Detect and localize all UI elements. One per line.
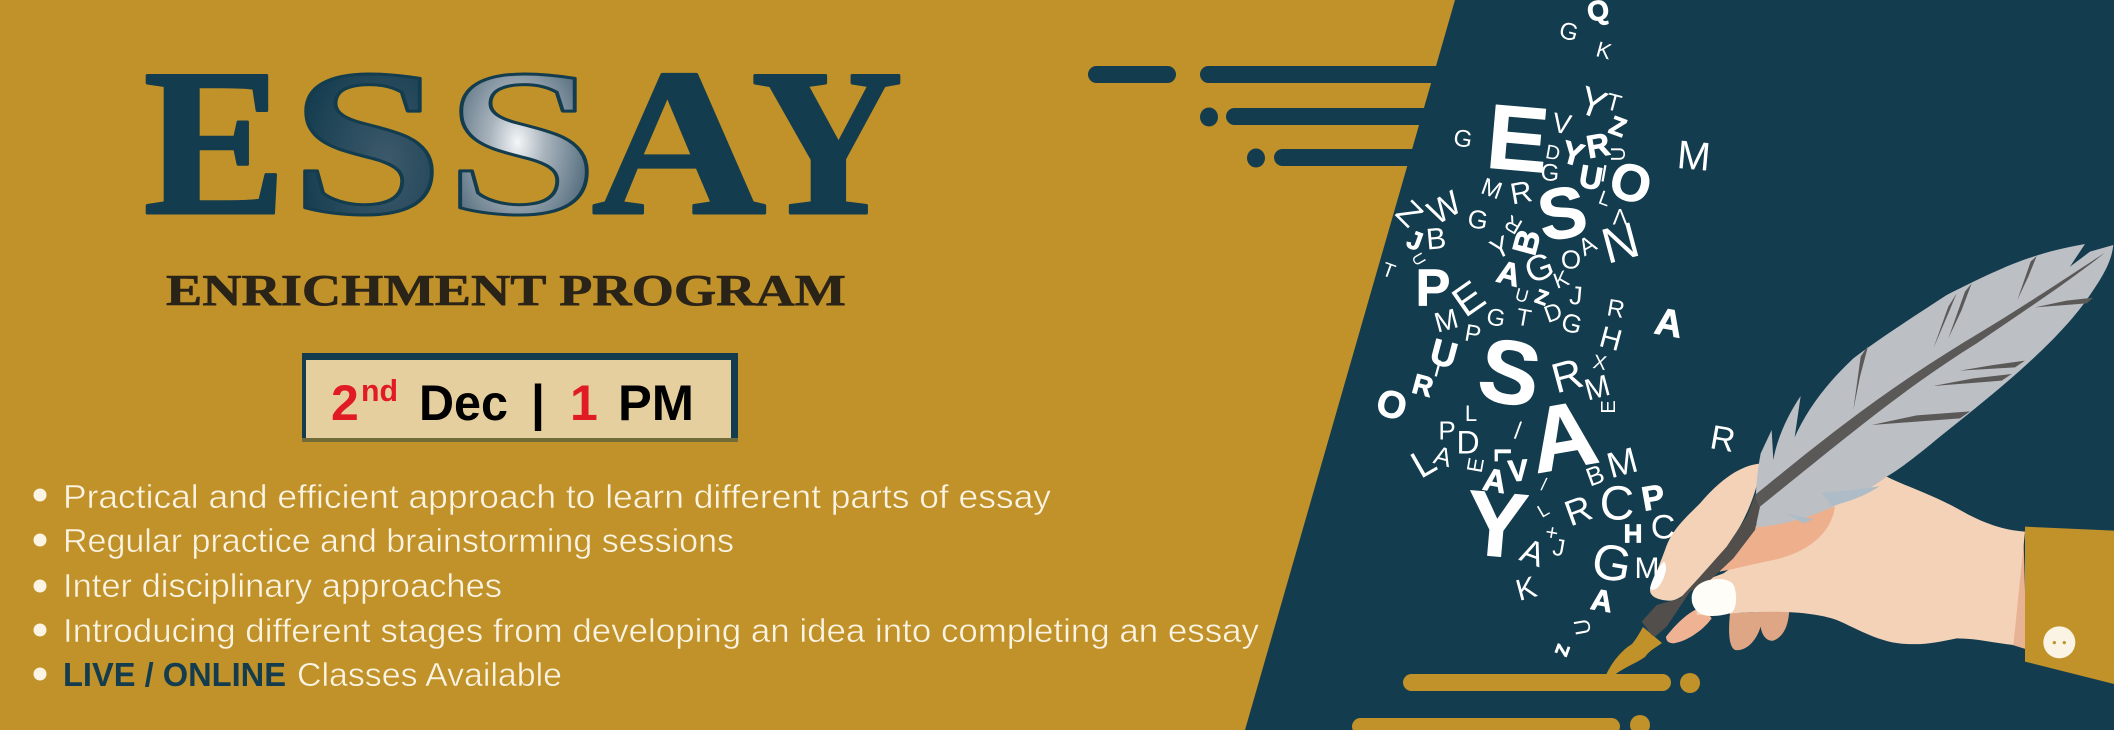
floating letters: T (1603, 88, 1625, 118)
floating letters: Z (1551, 642, 1574, 659)
floating letters: K (1594, 36, 1615, 64)
floating letters: M (1634, 552, 1660, 585)
floating letters: Z (1532, 286, 1551, 311)
floating letters: W (1421, 184, 1468, 233)
floating letters: I (1598, 160, 1609, 188)
bullet 5 (34, 656, 562, 693)
floating letters (1372, 0, 1738, 659)
floating letters: J (1403, 224, 1427, 257)
floating letters: Y (1485, 229, 1516, 266)
title: ESSAY: E (144, 26, 286, 259)
floating letters: P (1463, 319, 1483, 349)
bullet 1: Practical and efficient approach to learn different parts of essay (63, 478, 1052, 515)
floating letters: D (1544, 141, 1562, 165)
floating letters: O (1372, 382, 1411, 430)
floating letters: B (1582, 458, 1608, 492)
floating letters: R (1409, 368, 1437, 403)
title: ESSAY: S (445, 26, 599, 258)
icon: shirt sleeve (2013, 527, 2114, 684)
floating letters: V (1550, 107, 1574, 141)
icon: pen nib (1606, 627, 1662, 677)
floating letters: U (1576, 158, 1605, 197)
floating letters: E (1462, 456, 1489, 474)
floating letters: G (1539, 159, 1560, 187)
floating letters: E (1598, 400, 1620, 414)
date badge: | (531, 375, 545, 432)
floating letters: + (1543, 519, 1560, 546)
floating letters: A (1493, 253, 1525, 294)
floating letters: M (1478, 173, 1506, 205)
floating letters: P (1438, 415, 1456, 445)
floating letters: S (1532, 170, 1593, 257)
floating letters: L (1534, 499, 1553, 522)
floating letters: E (1483, 86, 1553, 193)
floating letters: G (1558, 306, 1586, 340)
floating letters: A (1652, 301, 1686, 347)
floating letters: P (1416, 260, 1450, 318)
floating letters: L (1596, 187, 1614, 211)
floating letters: H (1596, 321, 1625, 358)
bullet list (34, 478, 1260, 693)
floating letters: R (1508, 175, 1535, 211)
bullet 2: Regular practice and brainstorming sessions (63, 522, 734, 559)
floating letters: U (1513, 284, 1531, 307)
floating letters: L (1465, 401, 1477, 426)
icon: feather (1755, 244, 2113, 527)
floating letters: M (1602, 439, 1642, 486)
floating letters: K (1512, 571, 1540, 608)
floating letters: N (1596, 211, 1645, 275)
bullet 5: Classes Available (297, 656, 562, 693)
floating letters: R (1707, 418, 1738, 460)
title: ESSAY: A (592, 26, 766, 258)
icon: pen barrel (1642, 495, 1760, 637)
floating letters: D (1541, 297, 1566, 329)
floating letters: J (1568, 280, 1584, 311)
floating letters: M (1431, 303, 1461, 339)
floating letters: Y (1462, 472, 1532, 579)
floating letters: G (1451, 124, 1474, 154)
floating letters: Y (1572, 78, 1613, 129)
title: ESSAY (144, 26, 903, 259)
floating letters: R (1605, 294, 1627, 324)
floating letters: G (1556, 17, 1581, 48)
floating letters: H (1624, 518, 1642, 548)
icon: fingernail (1650, 562, 1666, 590)
date badge: Dec (419, 375, 508, 431)
illustration: hand holding quill (1642, 244, 2114, 684)
bullet 5: LIVE / ONLINE (63, 656, 286, 693)
icon: hand (1697, 477, 2025, 645)
floating letters: / (1513, 417, 1523, 445)
floating letters: A (1515, 531, 1550, 575)
floating letters: E (1443, 271, 1493, 326)
title: ESSAY: Y (751, 27, 903, 259)
floating letters: A (1431, 440, 1456, 473)
bullet 4: Introducing different stages from developing an idea into completing an essay (63, 612, 1260, 649)
speed lines (1088, 66, 1460, 168)
floating letters: Z (1388, 193, 1430, 235)
floating letters: O (1604, 150, 1658, 217)
floating letters: Z (1605, 110, 1631, 143)
gold writing lines (1352, 673, 1700, 730)
floating letters: X (1591, 351, 1608, 375)
floating letters: / (1540, 474, 1548, 495)
floating letters: M (1675, 133, 1712, 180)
floating letters: C (1600, 477, 1634, 530)
date badge (302, 353, 738, 442)
floating letters: P (1639, 478, 1668, 519)
floating letters: U (1426, 330, 1462, 377)
floating letters: V (1612, 204, 1627, 229)
panel: navy diagonal (1245, 0, 2114, 730)
floating letters: A (1522, 381, 1605, 493)
floating letters: G (1465, 203, 1491, 236)
date badge: nd (361, 373, 398, 408)
floating letters: R (1546, 349, 1588, 402)
floating letters: T (1379, 259, 1398, 284)
floating letters: S (1471, 319, 1548, 428)
floating letters: A (1574, 230, 1601, 262)
floating letters: Y (1558, 133, 1588, 174)
floating letters: J (1551, 534, 1567, 562)
floating letters: R (1584, 126, 1613, 165)
date badge: PM (618, 375, 694, 431)
floating letters: I (1431, 355, 1444, 383)
floating letters: U (1608, 147, 1630, 161)
floating letters: U (1569, 617, 1596, 637)
subtitle: enrichment program: ENRICHMENT PROGRAM (166, 266, 846, 315)
floating letters: V (1507, 454, 1530, 489)
floating letters: L (1490, 448, 1515, 462)
floating letters: A (1480, 461, 1509, 500)
bullet 3: Inter disciplinary approaches (63, 567, 502, 604)
date badge: 2 (331, 375, 359, 431)
icon: thumbnail (1692, 579, 1736, 616)
floating letters: U (1408, 250, 1428, 269)
floating letters: C (1651, 508, 1675, 546)
floating letters: M (1581, 369, 1614, 407)
title: ESSAY: S (290, 26, 444, 258)
floating letters: B (1506, 226, 1549, 259)
floating letters: O (1561, 244, 1581, 274)
floating letters: R (1500, 210, 1526, 239)
icon: lower fingers (1666, 607, 1789, 650)
date badge: 1 (570, 375, 598, 431)
floating letters: D (1456, 425, 1480, 461)
floating letters: A (1588, 583, 1615, 619)
floating letters: R (1559, 487, 1597, 534)
floating letters: K (1550, 265, 1573, 294)
icon: index finger (1650, 463, 1762, 601)
floating letters: G (1484, 303, 1507, 333)
floating letters: T (1514, 304, 1534, 333)
floating letters: G (1588, 532, 1636, 594)
floating letters: G (1519, 243, 1559, 291)
icon: palm shadow (1700, 507, 1835, 572)
floating letters: L (1404, 440, 1443, 487)
floating letters: B (1425, 222, 1448, 257)
